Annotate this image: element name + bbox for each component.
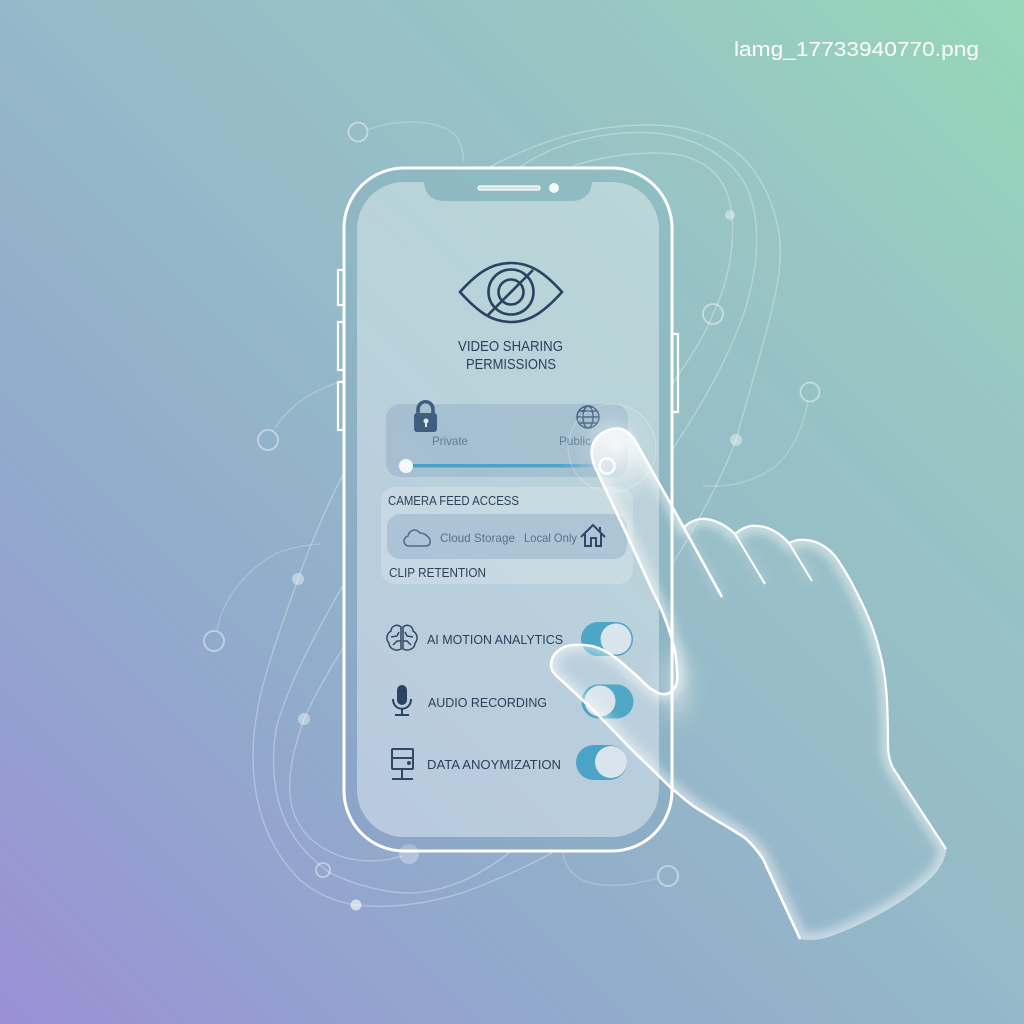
slider track	[412, 464, 600, 468]
icon: crossed-out eye	[460, 263, 562, 322]
panel: camera feed access	[381, 487, 633, 584]
icon: globe	[577, 406, 599, 428]
title	[458, 339, 563, 373]
phone side buttons	[338, 270, 678, 430]
toggle	[581, 622, 633, 656]
icon: lock	[414, 402, 437, 432]
touch ripple	[568, 404, 656, 492]
phone body	[344, 168, 672, 851]
camera dot	[549, 183, 559, 193]
wrist edge	[800, 849, 946, 940]
file name label: lamg_17733940770.png	[734, 39, 979, 61]
heading: clip retention: CLIP RETENTION	[389, 565, 486, 580]
index finger and thumb outline	[551, 428, 800, 939]
phone screen	[357, 182, 659, 837]
label: AI MOTION ANALYTICS	[427, 632, 563, 647]
node: bottom right ring	[658, 866, 678, 886]
icon: microphone	[393, 685, 411, 715]
node: left ring	[258, 430, 278, 450]
label: DATA ANOYMIZATION	[427, 757, 561, 772]
label: AUDIO RECORDING	[428, 695, 547, 710]
hand glass fill	[540, 420, 960, 950]
node: upper right ring	[703, 304, 723, 324]
icon: server	[392, 749, 413, 779]
slider knob	[399, 459, 413, 473]
title: VIDEO SHARING	[458, 339, 563, 355]
phone	[338, 168, 678, 851]
node: top left ring	[348, 122, 368, 142]
heading: camera feed access: CAMERA FEED ACCESS	[388, 493, 519, 508]
node: right ring	[800, 382, 820, 402]
outer glow near thumb	[664, 649, 688, 721]
icon: house	[581, 525, 605, 546]
label: cloud storage: Cloud Storage	[440, 531, 515, 545]
label: public: Public	[559, 434, 591, 448]
slider touch ring	[600, 458, 614, 474]
icon: brain	[387, 625, 417, 650]
row: data anonymization	[392, 745, 627, 780]
toggle	[576, 745, 627, 780]
node: lower left ring	[204, 631, 224, 651]
node: bottom left ring	[316, 863, 330, 877]
label: local only: Local Only	[524, 531, 577, 545]
row: AI motion analytics	[387, 622, 633, 656]
panel: privacy slider	[386, 402, 628, 477]
speaker	[478, 186, 540, 190]
title: PERMISSIONS	[466, 357, 556, 373]
storage choice row	[387, 514, 627, 559]
network solid dots	[292, 210, 742, 910]
icon: cloud	[404, 530, 430, 546]
network curves and nodes	[217, 122, 808, 906]
network nodes	[204, 122, 820, 886]
knuckle lines	[735, 534, 812, 584]
toggle	[582, 685, 633, 718]
hand outline	[684, 519, 946, 849]
hand	[540, 420, 960, 950]
row: audio recording	[393, 685, 633, 718]
label: private: Private	[432, 434, 468, 448]
